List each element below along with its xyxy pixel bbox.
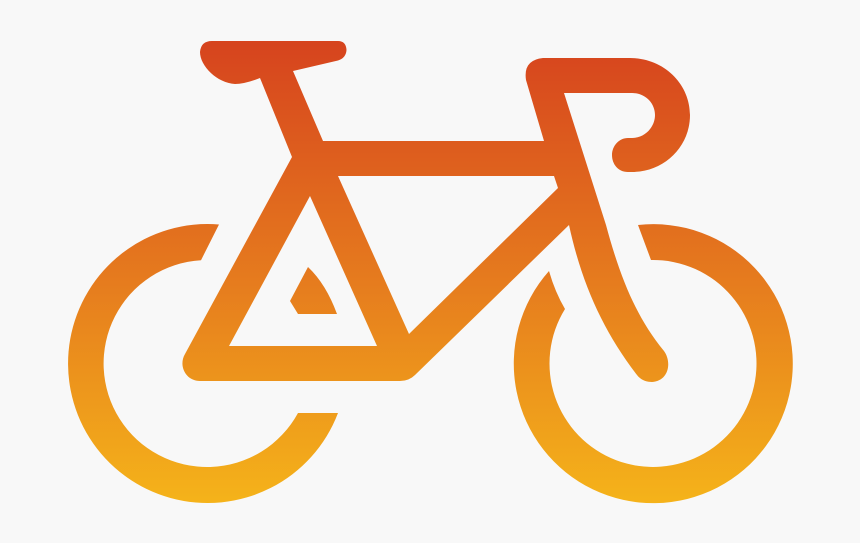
left wheel — [68, 224, 338, 503]
right wheel — [514, 224, 793, 503]
bicycle frame with saddle and handlebar — [182, 41, 690, 382]
